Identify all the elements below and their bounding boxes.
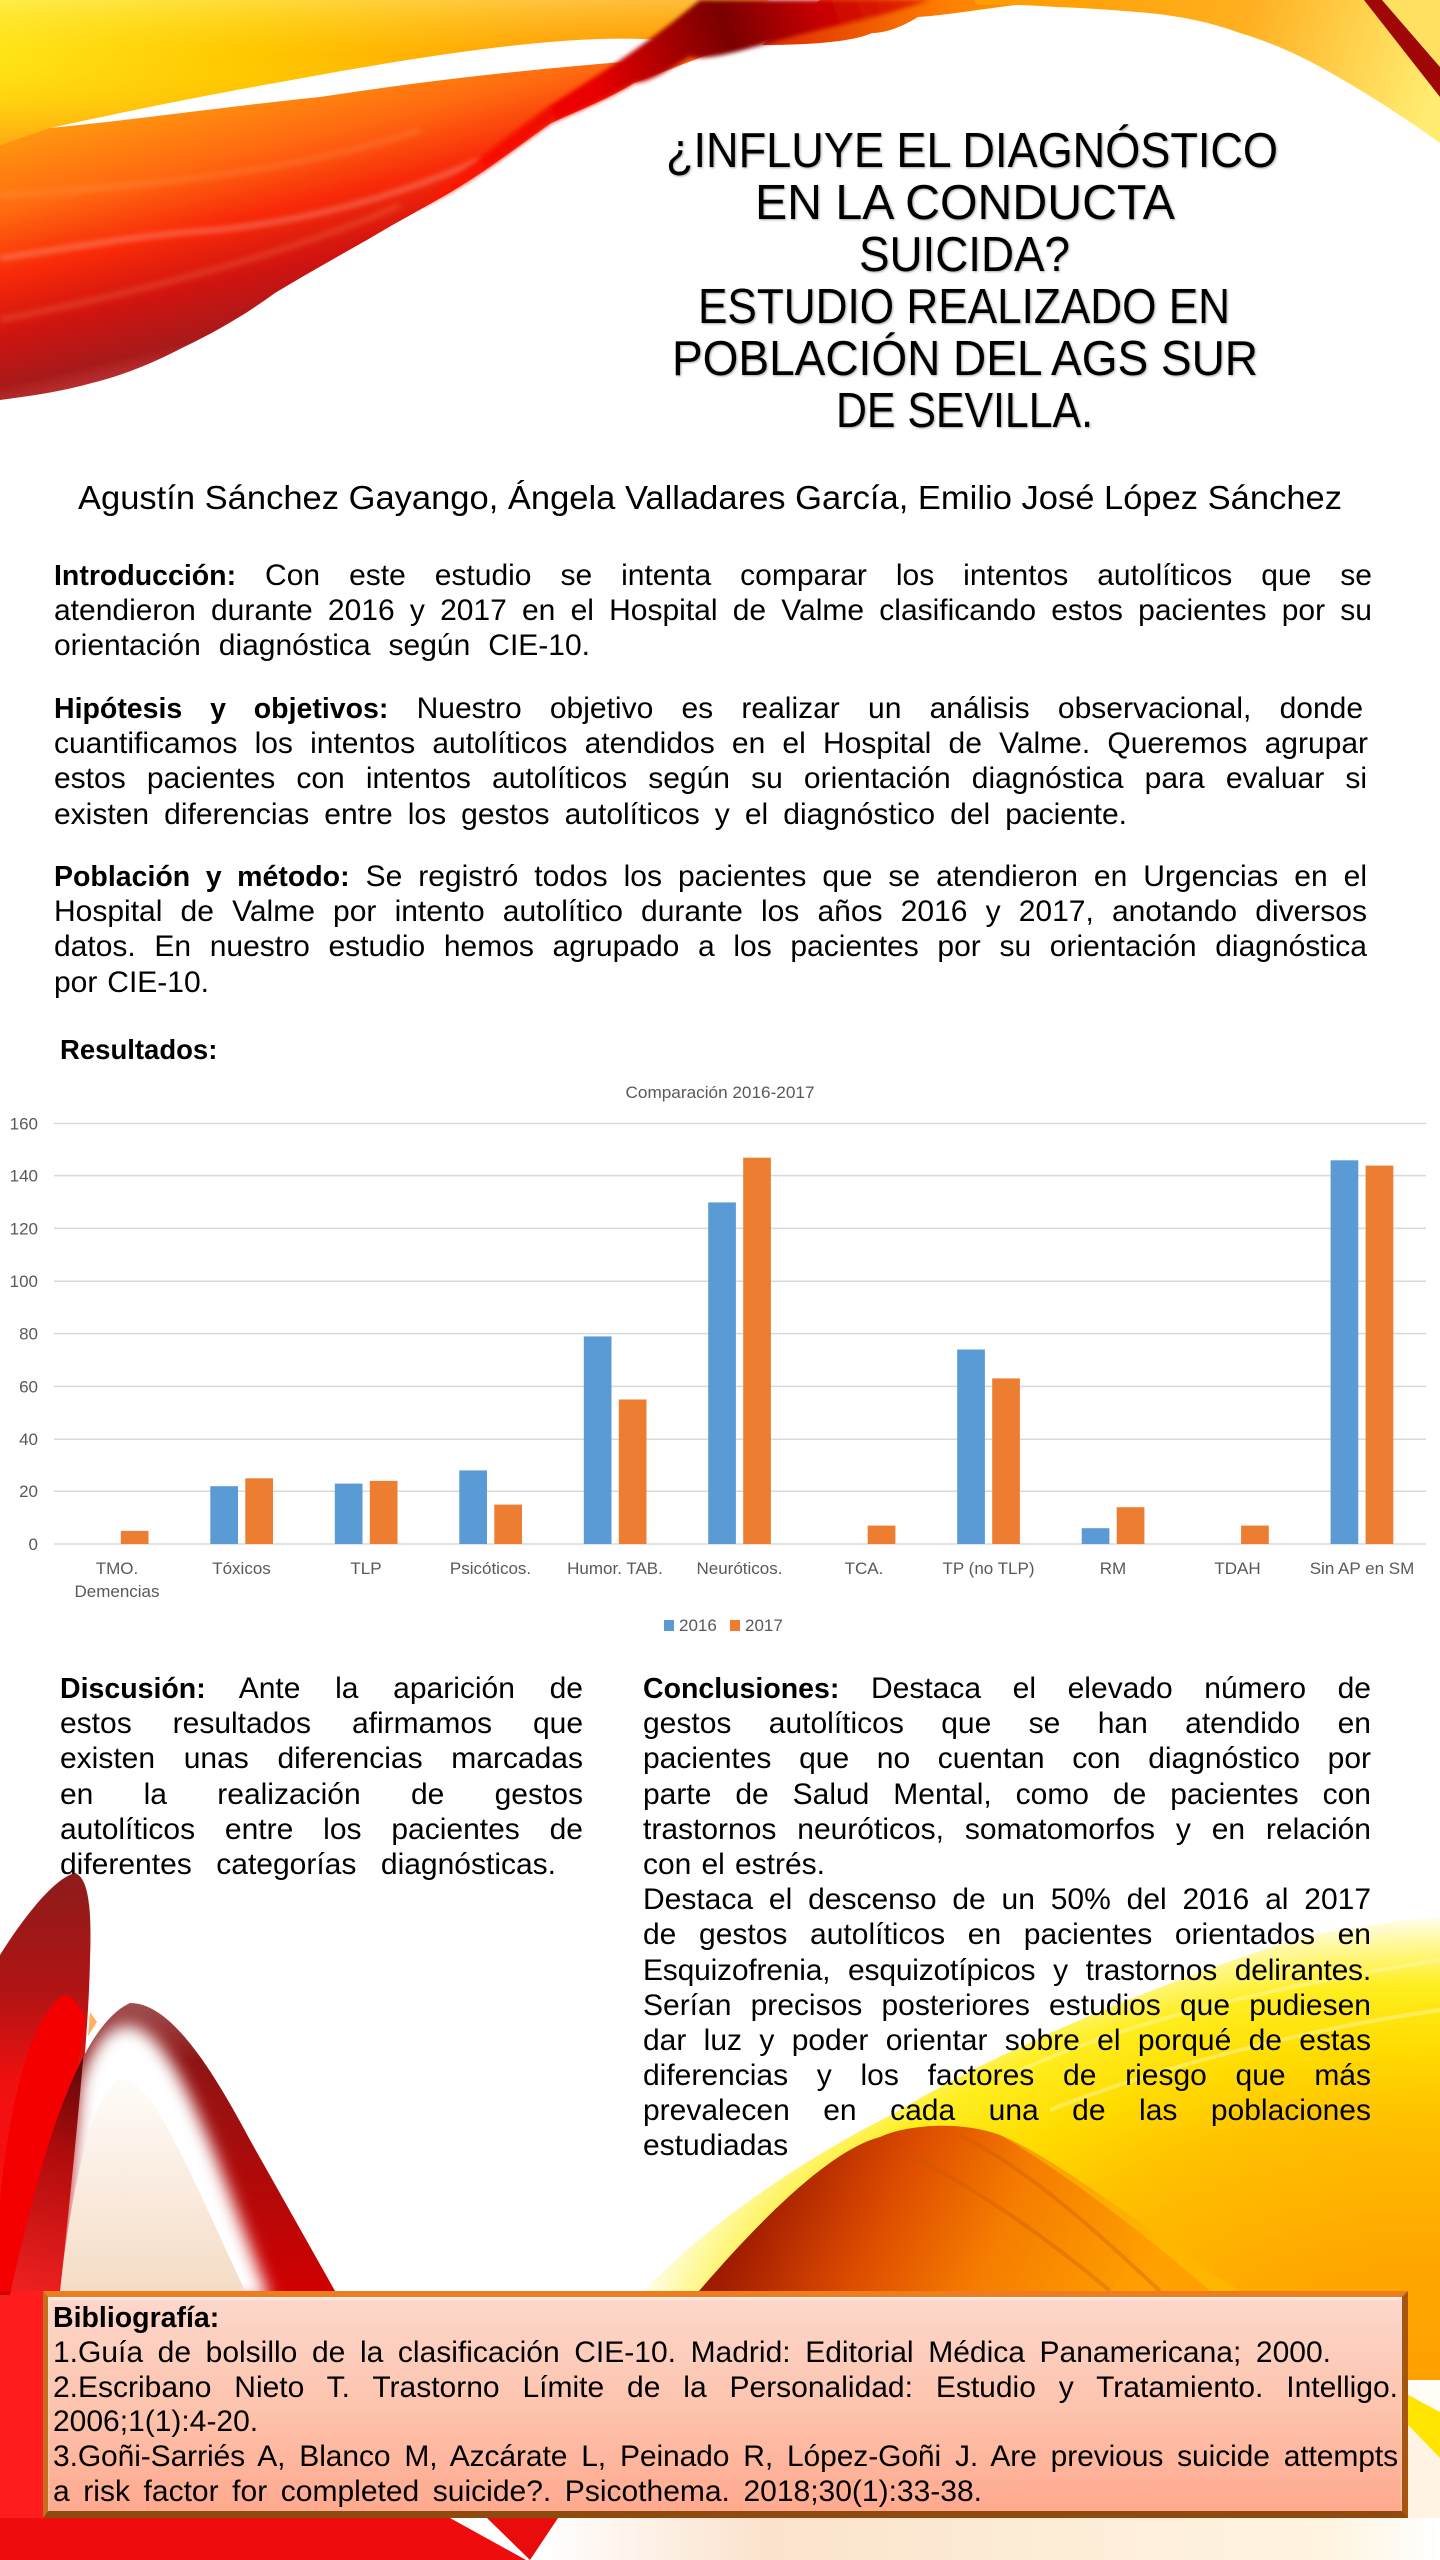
title: DE SEVILLA. (836, 384, 1093, 438)
y axis labels (10, 1114, 38, 1554)
text block: población y método: Hospital de Valme por intento autolítico durante los años 2016 y 2017, anotando diversos (54, 895, 1367, 928)
chart title: Comparación 2016-2017 (626, 1083, 814, 1102)
y axis labels: 120 (10, 1220, 38, 1238)
title: EN LA CONDUCTA (755, 176, 1175, 230)
text block: discusión: Discusión: Ante la aparición de (60, 1672, 583, 1705)
bottom orange hill (699, 2126, 1240, 2291)
top ribbon: red and orange band (0, 50, 720, 400)
text block: conclusiones: Serían precisos posteriores estudios que pudiesen (643, 1989, 1371, 2022)
y axis labels: 100 (10, 1272, 38, 1291)
title (666, 124, 1278, 438)
text block: conclusiones: prevalecen en cada una de las poblaciones (643, 2094, 1371, 2127)
panel: bibliografía: a risk factor for completed suicide?. Psicothema. 2018;30(1):33-38. (53, 2475, 982, 2508)
panel: bibliografía: Bibliografía: (53, 2302, 219, 2334)
category labels: Demencias (74, 1582, 160, 1601)
panel: bibliografía: 2006;1(1):4-20. (53, 2405, 258, 2438)
bottom left red ribbon (0, 1873, 90, 2560)
legend (664, 1616, 783, 1635)
text block: discusión: estos resultados afirmamos que (60, 1707, 583, 1740)
category labels: Psicóticos. (450, 1559, 531, 1578)
bottom strip behind the bibliography (528, 2380, 1440, 2560)
category labels: RM (1100, 1559, 1126, 1578)
y axis labels: 160 (10, 1114, 38, 1134)
text block: población y método: por CIE-10. (54, 966, 209, 999)
red ribbon below the bibliography (0, 2518, 558, 2560)
category labels: Sin AP en SM (1310, 1559, 1414, 1578)
bar chart: Comparación 2016-2017 (10, 1083, 1426, 1635)
text block: introducción: Introducción: Con este estudio se intenta comparar los intentos autolíticos que se (54, 559, 1372, 592)
authors: Agustín Sánchez Gayango, Ángela Valladares García, Emilio José López Sánchez (78, 479, 1342, 516)
text block: conclusiones: Esquizofrenia, esquizotípicos y trastornos delirantes. (643, 1954, 1371, 1986)
panel: bibliografía (43, 2291, 1408, 2518)
category labels: Tóxicos (212, 1559, 271, 1578)
text block: discusión: autolíticos entre los pacientes de (60, 1813, 583, 1846)
category labels: Humor. TAB. (567, 1559, 663, 1578)
legend: 2016 (679, 1616, 717, 1635)
title: ¿INFLUYE EL DIAGNÓSTICO (666, 124, 1278, 178)
heading: resultados: Resultados: (60, 1034, 217, 1065)
text block: conclusiones: Destaca el descenso de un 50% del 2016 al 2017 (643, 1883, 1371, 1916)
bottom right yellow swoosh (640, 1917, 1440, 2400)
text block: conclusiones (643, 1672, 1371, 2162)
text block: hipótesis y objetivos: cuantificamos los intentos autolíticos atendidos en el Hospital de Valme. Queremos agrupar (54, 727, 1368, 760)
text block: conclusiones: dar luz y poder orientar sobre el porqué de estas (643, 2024, 1371, 2057)
top ribbon: dark red strand and orange fold (420, 0, 1062, 208)
y axis labels: 60 (19, 1378, 38, 1396)
text block: conclusiones: con el estrés. (643, 1848, 825, 1881)
top ribbon: yellow and orange band (0, 0, 770, 145)
text block: discusión: diferentes categorías diagnósticas. (60, 1848, 556, 1881)
text block: conclusiones: pacientes que no cuentan con diagnóstico por (643, 1742, 1371, 1775)
text block: conclusiones: Conclusiones: Destaca el elevado número de (643, 1672, 1371, 1705)
category labels (74, 1559, 1414, 1601)
text block: hipótesis y objetivos: Hipótesis y objetivos: Nuestro objetivo es realizar un análisis observacional, donde (54, 692, 1363, 725)
panel: bibliografía: 2.Escribano Nieto T. Trastorno Límite de la Personalidad: Estudio y Tratamiento. Intelligo. (53, 2371, 1398, 2404)
text block: hipótesis y objetivos (54, 692, 1368, 831)
category labels: TMO. (96, 1559, 138, 1578)
text block: población y método: Población y método: Se registró todos los pacientes que se atendieron en Urgencias en el (54, 860, 1367, 893)
bottom left pale arch (0, 2000, 340, 2300)
text block: conclusiones: gestos autolíticos que se han atendido en (643, 1707, 1371, 1740)
title: ESTUDIO REALIZADO EN (698, 280, 1230, 334)
text block: población y método: datos. En nuestro estudio hemos agrupado a los pacientes por su orientación diagnóstica (54, 930, 1367, 963)
category labels: TCA. (845, 1559, 883, 1578)
title: SUICIDA? (859, 228, 1070, 282)
text block: conclusiones: de gestos autolíticos en pacientes orientados en (643, 1918, 1371, 1951)
bars 2017 (121, 1158, 1393, 1544)
category labels: TLP (350, 1559, 382, 1578)
top right ribbon (975, 0, 1440, 143)
y axis labels: 20 (19, 1482, 38, 1501)
text block: conclusiones: trastornos neuróticos, somatomorfos y en relación (643, 1813, 1371, 1846)
text block: introducción: orientación diagnóstica según CIE-10. (54, 629, 590, 662)
title: POBLACIÓN DEL AGS SUR (672, 332, 1258, 386)
category labels: TP (no TLP) (943, 1559, 1034, 1578)
text block: conclusiones: estudiadas (643, 2129, 788, 2162)
text block: población y método (54, 860, 1367, 999)
category labels: TDAH (1214, 1559, 1261, 1578)
y axis labels: 80 (19, 1324, 38, 1344)
text block: hipótesis y objetivos: existen diferencias entre los gestos autolíticos y el diagnóstico del paciente. (54, 798, 1127, 831)
panel: bibliografía: 1.Guía de bolsillo de la clasificación CIE-10. Madrid: Editorial Médica Panamericana; 2000. (53, 2336, 1331, 2369)
text block: conclusiones: parte de Salud Mental, como de pacientes con (643, 1778, 1371, 1811)
text block: introducción (54, 559, 1372, 662)
text block: discusión (60, 1672, 583, 1881)
text block: introducción: atendieron durante 2016 y 2017 en el Hospital de Valme clasificando estos pacientes por su (54, 594, 1372, 627)
text block: hipótesis y objetivos: estos pacientes con intentos autolíticos según su orientación diagnóstica para evaluar si (54, 762, 1367, 795)
bars 2016 (210, 1160, 1358, 1544)
text block: discusión: existen unas diferencias marcadas (60, 1742, 583, 1775)
text block: discusión: en la realización de gestos (60, 1778, 583, 1811)
y axis labels: 40 (19, 1430, 38, 1449)
y axis labels: 0 (29, 1535, 38, 1554)
y axis labels: 140 (10, 1166, 38, 1186)
category labels: Neuróticos. (697, 1559, 782, 1578)
text block: conclusiones: diferencias y los factores de riesgo que más (643, 2059, 1371, 2092)
panel: bibliografía: 3.Goñi-Sarriés A, Blanco M, Azcárate L, Peinado R, López-Goñi J. Are previous suicide attempts (53, 2440, 1398, 2473)
legend: 2017 (745, 1616, 783, 1635)
